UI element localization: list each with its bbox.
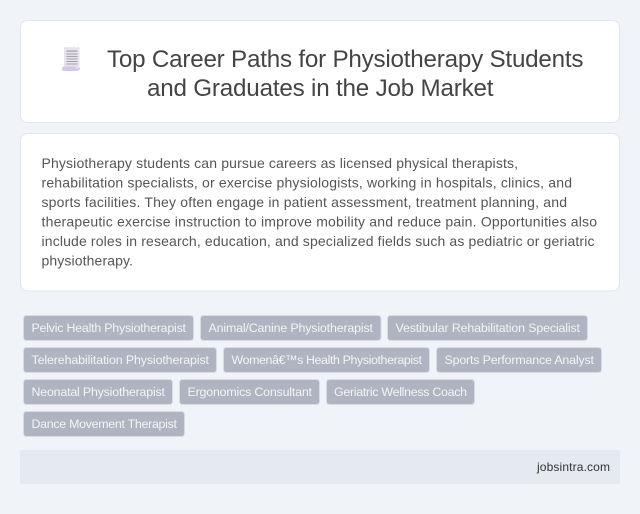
tag: Animal/Canine Physiotherapist: [200, 316, 381, 340]
tag: Geriatric Wellness Coach: Geriatric Wellness Coach: [334, 385, 467, 399]
tag: Telerehabilitation Physiotherapist: [24, 348, 216, 372]
tag: Geriatric Wellness Coach: [326, 380, 474, 404]
tag: Women's Health Physiotherapist: [224, 348, 430, 372]
text block: description: [42, 155, 597, 268]
tag: Dance Movement Therapist: [24, 412, 184, 436]
icon: document scroll: [62, 47, 80, 71]
footer source text: jobsintra.com: [536, 460, 610, 474]
title: Top Career Paths for Physiotherapy Students: [107, 46, 584, 73]
tag: Women's Health Physiotherapist: Womenâ€™s Health Physiotherapist: [232, 353, 423, 367]
tag: Dance Movement Therapist: Dance Movement Therapist: [32, 417, 178, 431]
panel: description: [20, 134, 620, 291]
text block: description: include roles in research, education, and specialized fields such as pediatric or geriatric: [42, 233, 594, 249]
panel: header: [20, 20, 620, 122]
text block: description: physiotherapy.: [42, 252, 133, 268]
text block: description: rehabilitation specialists, or exercise physiologists, working in hospitals, clinics, and: [42, 174, 572, 190]
title: [107, 46, 584, 102]
tag: Animal/Canine Physiotherapist: Animal/Canine Physiotherapist: [208, 321, 374, 335]
footer bar: [20, 450, 620, 484]
tag: Vestibular Rehabilitation Specialist: [388, 316, 588, 340]
text block: description: Physiotherapy students can pursue careers as licensed physical therapists,: [42, 155, 518, 171]
tag: Neonatal Physiotherapist: Neonatal Physiotherapist: [32, 385, 166, 399]
tag: Pelvic Health Physiotherapist: Pelvic Health Physiotherapist: [32, 321, 187, 335]
tag: Ergonomics Consultant: Ergonomics Consultant: [188, 385, 313, 399]
tag: Neonatal Physiotherapist: [24, 380, 172, 404]
tag list: career paths: [24, 316, 602, 436]
tag: Pelvic Health Physiotherapist: [24, 316, 194, 340]
text block: description: sports facilities. They often engage in patient assessment, treatment planning, and: [42, 194, 567, 210]
tag: Sports Performance Analyst: [436, 348, 602, 372]
title: and Graduates in the Job Market: [147, 75, 494, 102]
tag: Ergonomics Consultant: [180, 380, 320, 404]
tag: Telerehabilitation Physiotherapist: Telerehabilitation Physiotherapist: [32, 353, 210, 367]
tag: Vestibular Rehabilitation Specialist: Vestibular Rehabilitation Specialist: [396, 321, 581, 335]
tag: Sports Performance Analyst: Sports Performance Analyst: [444, 353, 595, 367]
text block: description: therapeutic exercise instruction to improve mobility and reduce pain. Opportunities also: [42, 214, 597, 230]
